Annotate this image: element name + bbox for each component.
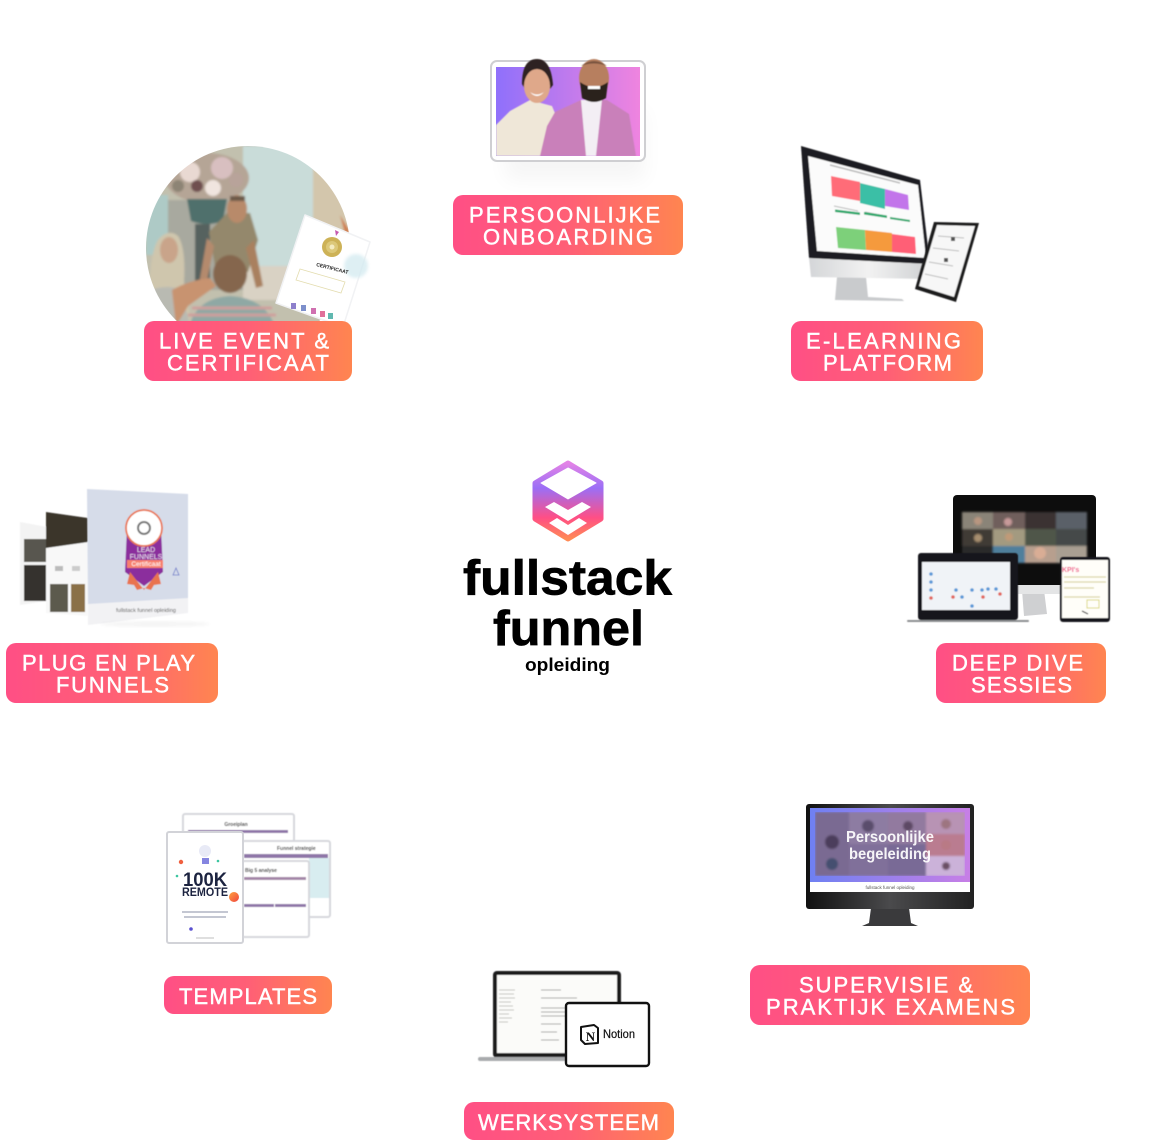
template sheets: Groeiplan [224,822,248,828]
label: onboarding: ONBOARDING [483,224,653,250]
label: e-learning: E-LEARNING [806,328,961,354]
label: supervisie [750,965,1030,1025]
template sheets [183,814,330,937]
label: e-learning: PLATFORM [823,350,952,376]
panel: work system [464,971,674,1140]
cover sheet 100K Remote [167,832,243,943]
tablet with Notion logo: Notion [603,1027,635,1041]
tablet [915,222,979,302]
certificate card: CERTIFICAAT [316,262,349,276]
wordmark: funnel [493,602,644,656]
label: deep dive: DEEP DIVE [952,650,1083,676]
soft shadow [505,110,645,180]
product box with badge: fullstack funnel opleiding [116,608,176,614]
label: plug and play: PLUG EN PLAY [22,650,195,676]
label: live event: LIVE EVENT & [159,328,329,354]
product box with badge: FUNNELS [130,554,163,561]
wordmark: fullstack [463,552,673,606]
label: werksysteem [464,1102,674,1140]
label: live event: CERTIFICAAT [167,350,329,376]
panel: plug and play funnels [6,489,218,703]
label: live event [144,321,352,381]
laptop with Notion page [478,971,621,1061]
monitor with course cards [801,146,930,301]
wordmark [463,552,673,675]
logo: fullstack funnel [463,463,673,675]
panel: templates [164,814,332,1014]
cover sheet 100K Remote: 100K [183,870,227,891]
product box with badge [87,489,188,625]
panel: live event and certificate [140,140,370,381]
panel: deep dive sessions [907,495,1110,703]
panel: personal onboarding [453,59,683,255]
label: deep dive: SESSIES [971,672,1072,698]
label: onboarding [453,195,683,255]
panel: e-learning platform [791,146,983,381]
photo frame [491,61,645,161]
people in photo [496,59,636,156]
template sheets: Big 5 analyse [245,868,277,874]
template sheets: Funnel strategie [277,846,316,852]
laptop with funnel map [907,553,1029,622]
tablet with KPI sheet: KPI's [1062,567,1079,574]
tablet with KPI sheet [1060,557,1110,622]
web pages behind box [20,512,88,616]
wordmark: opleiding [525,654,610,675]
label: templates: TEMPLATES [179,984,317,1009]
label: werksysteem: WERKSYSTEEM [478,1110,659,1135]
desktop monitor [806,804,974,926]
product box with badge: Certificaat [131,561,161,568]
desktop monitor: Persoonlijke [846,829,934,846]
certificate card [276,215,370,327]
desktop monitor: fullstack funnel opleiding [865,885,915,890]
label: deep dive [936,643,1106,703]
icon: stacked layers hexagon [535,463,601,539]
desktop with video call [953,495,1096,616]
label: supervisie: PRAKTIJK EXAMENS [766,994,1015,1020]
cover sheet 100K Remote: REMOTE [182,885,228,899]
tablet with Notion logo: N [586,1029,596,1044]
desktop monitor: begeleiding [849,846,931,863]
label: plug and play: FUNNELS [56,672,169,698]
label: onboarding: PERSOONLIJKE [469,202,660,228]
box shadow [100,621,210,627]
photo: live event in a circle [146,146,349,321]
label: e-learning [791,321,983,381]
label: templates [164,976,332,1014]
label: supervisie: SUPERVISIE & [799,972,973,998]
panel: supervision and practical exams [750,804,1030,1025]
product box with badge: LEAD [137,547,155,554]
label: plug and play [6,643,218,703]
tablet with Notion logo [566,1003,649,1066]
